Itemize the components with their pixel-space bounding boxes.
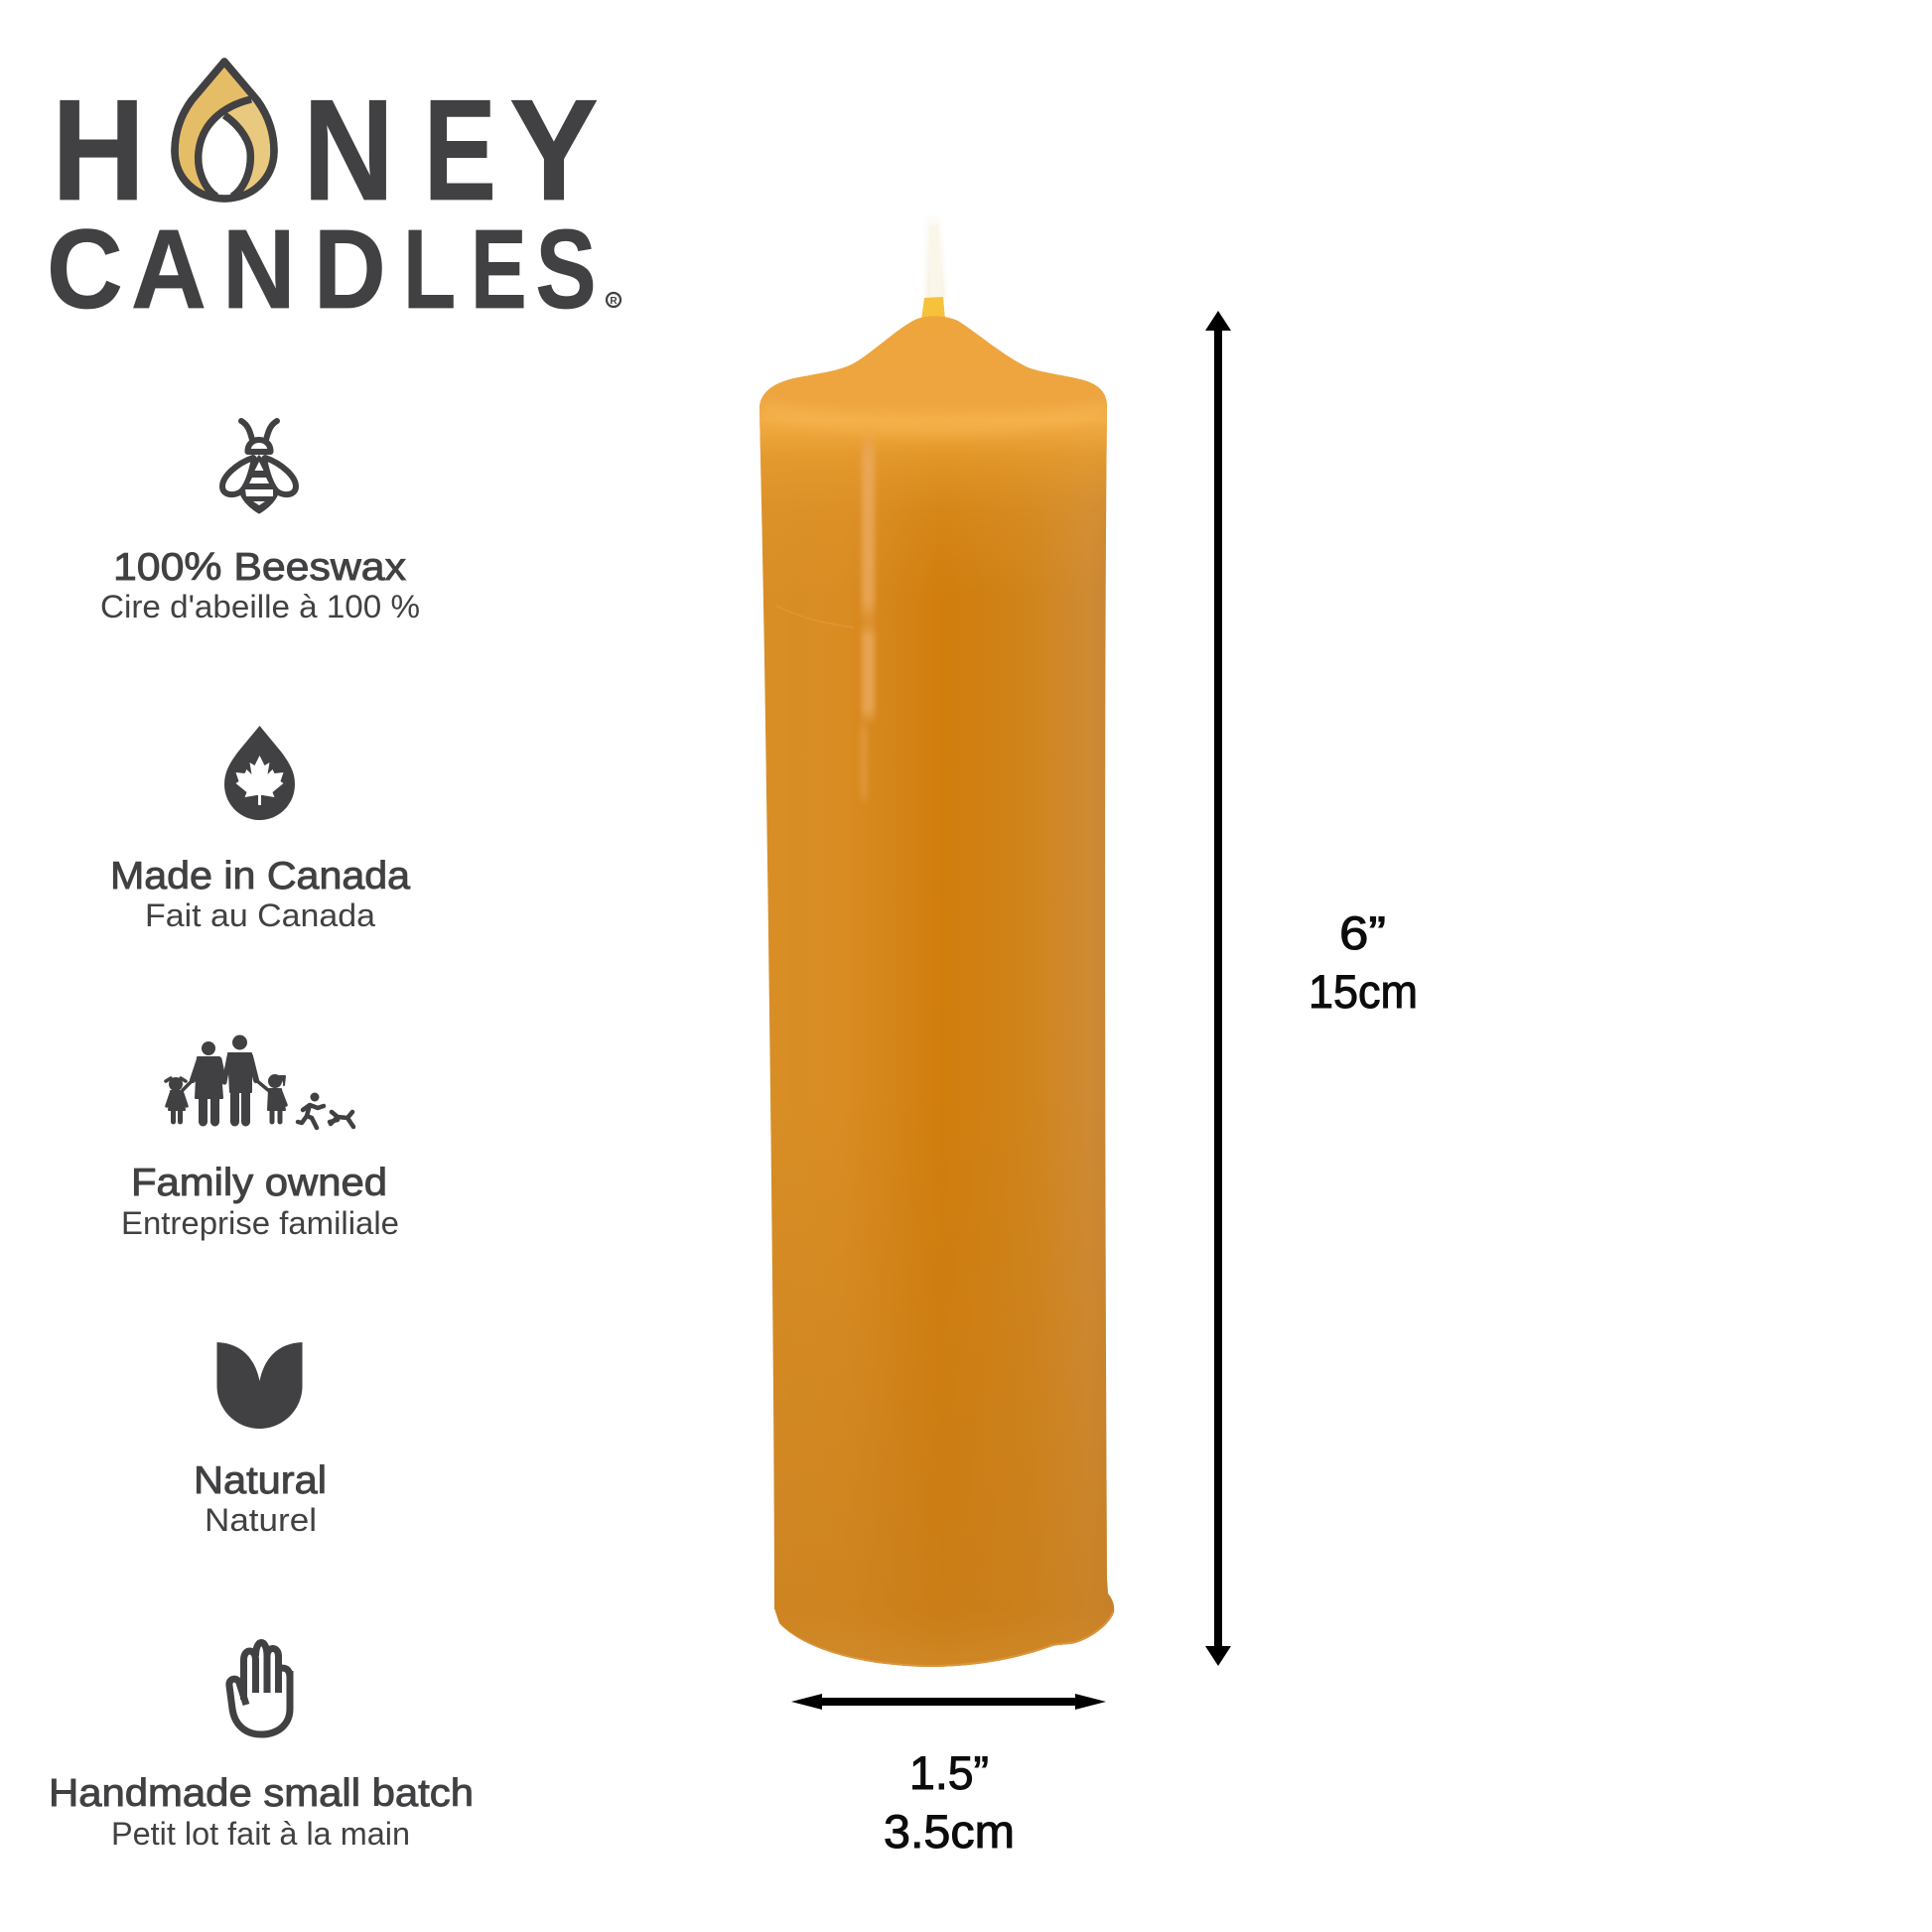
logo word: CANDLES: L (403, 207, 456, 333)
icon: tulip leaves (216, 1342, 302, 1429)
logo word: CANDLES (47, 207, 597, 333)
candle body (750, 308, 1127, 1688)
feature: Made in Canada (110, 726, 410, 933)
heading: Natural (194, 1459, 327, 1502)
logo word: HONEY: H (52, 70, 145, 231)
logo word: CANDLES: A (131, 207, 207, 333)
logo word: CANDLES: E (471, 207, 527, 333)
candle photo (750, 215, 1127, 1688)
logo word: HONEY: N (303, 69, 394, 230)
subheading: Naturel (205, 1502, 317, 1538)
feature: Handmade small batch (49, 1642, 474, 1852)
registered mark: R (610, 296, 618, 307)
feature: Family owned (121, 1035, 399, 1241)
width label: 3.5cm (884, 1805, 1015, 1858)
width label: 1.5” (909, 1746, 989, 1799)
feature: 100% Beeswax (100, 421, 420, 624)
logo word: CANDLES: S (536, 207, 597, 332)
logo word: CANDLES: D (314, 207, 386, 332)
icon: raised hand (229, 1642, 290, 1734)
logo flame drop standing in for the letter O (175, 62, 274, 199)
logo word: CANDLES: N (222, 207, 295, 332)
logo: Honey Candles (47, 62, 621, 333)
subheading: Entreprise familiale (121, 1205, 399, 1241)
icon: bee (222, 421, 296, 512)
logo word: HONEY: Y (509, 69, 599, 230)
heading: Made in Canada (110, 855, 410, 897)
logo word: CANDLES: C (47, 207, 123, 333)
width label (884, 1746, 1015, 1858)
icon: drop with maple leaf (224, 726, 295, 820)
heading: Handmade small batch (49, 1772, 474, 1815)
subheading: Cire d'abeille à 100 % (100, 589, 420, 624)
feature: Natural (194, 1342, 327, 1538)
heading: Family owned (131, 1162, 387, 1204)
logo word: HONEY (52, 69, 599, 231)
candle wick (921, 215, 945, 320)
icon: family with running child and dog (166, 1035, 353, 1128)
height label: 15cm (1309, 965, 1418, 1018)
height label: 6” (1339, 906, 1386, 959)
height label (1309, 906, 1418, 1018)
heading: 100% Beeswax (113, 546, 407, 589)
subheading: Fait au Canada (145, 897, 375, 933)
logo word: HONEY: E (424, 70, 496, 231)
width arrow (791, 1694, 1106, 1710)
subheading: Petit lot fait à la main (111, 1816, 410, 1852)
height arrow (1205, 311, 1231, 1666)
registered mark (607, 293, 621, 307)
